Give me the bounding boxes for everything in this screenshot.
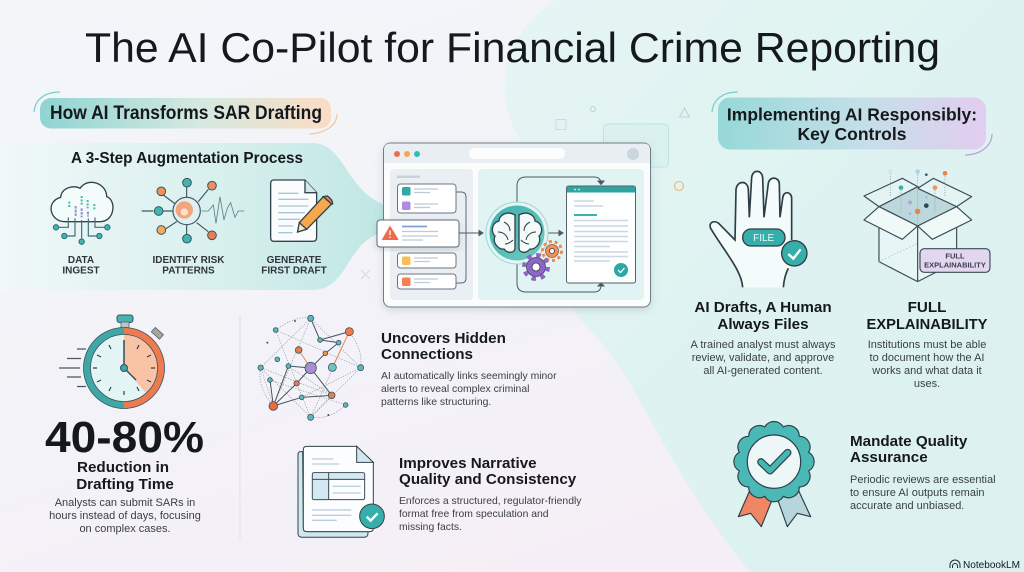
- icon: open transparent box: [864, 169, 990, 282]
- icon: data ingest cloud: [51, 182, 113, 244]
- icon: structured document: [298, 446, 384, 537]
- stat label: Reduction in: [77, 459, 169, 476]
- panel: how AI transforms SAR drafting heading: How AI Transforms SAR Drafting: [50, 103, 322, 124]
- text block: AI drafts, a human always files: [691, 299, 836, 377]
- text block: full explainability: [866, 299, 988, 390]
- stat description: Analysts can submit SARs in: [55, 497, 195, 509]
- text block: improves narrative quality: Improves Narrative: [399, 455, 537, 472]
- text block: full explainability: works and what data it: [871, 365, 982, 377]
- text block: full explainability: EXPLAINABILITY: [866, 316, 988, 333]
- text block: uncovers hidden connections: patterns like structuring.: [381, 397, 491, 408]
- title: The AI Co-Pilot for Financial Crime Reporting: [85, 24, 940, 71]
- text block: AI drafts, a human always files: all AI-generated content.: [703, 365, 823, 377]
- icon: human hand with file button: FILE: [753, 233, 775, 244]
- text block: improves narrative quality: Quality and Consistency: [399, 471, 577, 488]
- label: full explainability tag: FULL: [945, 252, 965, 260]
- panel: implementing AI responsibly heading: Implementing AI Responsibly:: [727, 104, 977, 124]
- alert card: [377, 220, 459, 247]
- label: data ingest: INGEST: [62, 266, 100, 276]
- label: identify risk patterns: IDENTIFY RISK: [152, 255, 225, 266]
- icon: stopwatch: [59, 315, 164, 408]
- text block: mandate quality assurance: accurate and unbiased.: [850, 500, 964, 512]
- text block: full explainability: uses.: [914, 378, 940, 390]
- panel: how AI transforms SAR drafting heading: [34, 92, 337, 134]
- text block: uncovers hidden connections: Connections: [381, 346, 473, 363]
- icon: identify risk patterns: [142, 178, 244, 243]
- text block: mandate quality assurance: Mandate Quality: [850, 433, 968, 450]
- icon: hidden connections network: [258, 315, 364, 420]
- icon: gears: [524, 242, 562, 279]
- stat: 40-80%: 40-80%: [45, 413, 204, 462]
- decorative shapes: [361, 106, 690, 279]
- text block: uncovers hidden connections: [381, 330, 557, 408]
- text block: AI drafts, a human always files: A trained analyst must always: [691, 339, 836, 351]
- panel: 3-step augmentation process: [0, 143, 385, 290]
- text block: AI drafts, a human always files: AI Drafts, A Human: [694, 299, 832, 316]
- stat description: hours instead of days, focusing: [49, 510, 201, 522]
- text block: mandate quality assurance: Assurance: [850, 449, 928, 466]
- stat description: on complex cases.: [79, 523, 171, 535]
- icon: quality rosette badge: [734, 421, 814, 527]
- label: full explainability tag: EXPLAINABILITY: [924, 260, 986, 270]
- panel: implementing AI responsibly heading: Key Controls: [798, 124, 907, 144]
- icon: human hand with file button: [710, 171, 807, 287]
- stat label: Drafting Time: [76, 476, 174, 493]
- text block: mandate quality assurance: to ensure AI outputs remain: [850, 487, 985, 499]
- text block: uncovers hidden connections: AI automatically links seemingly minor: [381, 371, 557, 382]
- text block: mandate quality assurance: Periodic reviews are essential: [850, 474, 996, 486]
- illustration: AI application window: [377, 143, 650, 307]
- label: identify risk patterns: PATTERNS: [162, 266, 215, 276]
- text block: mandate quality assurance: [850, 433, 996, 512]
- divider: [239, 315, 241, 540]
- text block: uncovers hidden connections: alerts to reveal complex criminal: [381, 384, 529, 395]
- text block: full explainability: FULL: [908, 299, 946, 316]
- window header: [384, 144, 650, 163]
- text block: full explainability: Institutions must be able: [868, 339, 986, 351]
- NotebookLM logo: NotebookLM: [963, 560, 1020, 571]
- icon: AI brain: [486, 202, 548, 264]
- label: data ingest: DATA: [68, 255, 94, 266]
- text block: improves narrative quality: missing facts.: [399, 522, 462, 533]
- text block: full explainability: to document how the AI: [870, 352, 984, 364]
- subheading: A 3-Step Augmentation Process: [71, 150, 303, 167]
- alert list cards: [398, 184, 466, 289]
- loop arrows: [517, 177, 604, 292]
- label: generate first draft: GENERATE: [267, 255, 322, 266]
- panel: implementing AI responsibly heading: [712, 92, 992, 155]
- text block: uncovers hidden connections: Uncovers Hidden: [381, 330, 506, 347]
- text block: improves narrative quality: format free from speculation and: [399, 509, 549, 520]
- text block: AI drafts, a human always files: Always Files: [717, 316, 809, 333]
- icon: generate first draft: [271, 180, 333, 241]
- arrow to AI brain: [459, 230, 483, 236]
- text block: improves narrative quality: [399, 455, 582, 533]
- text block: improves narrative quality: Enforces a structured, regulator-friendly: [399, 496, 582, 507]
- text block: AI drafts, a human always files: review, validate, and approve: [692, 352, 834, 364]
- generated SAR document: [566, 186, 636, 283]
- teal background blob: [505, 0, 1024, 572]
- label: generate first draft: FIRST DRAFT: [261, 266, 327, 276]
